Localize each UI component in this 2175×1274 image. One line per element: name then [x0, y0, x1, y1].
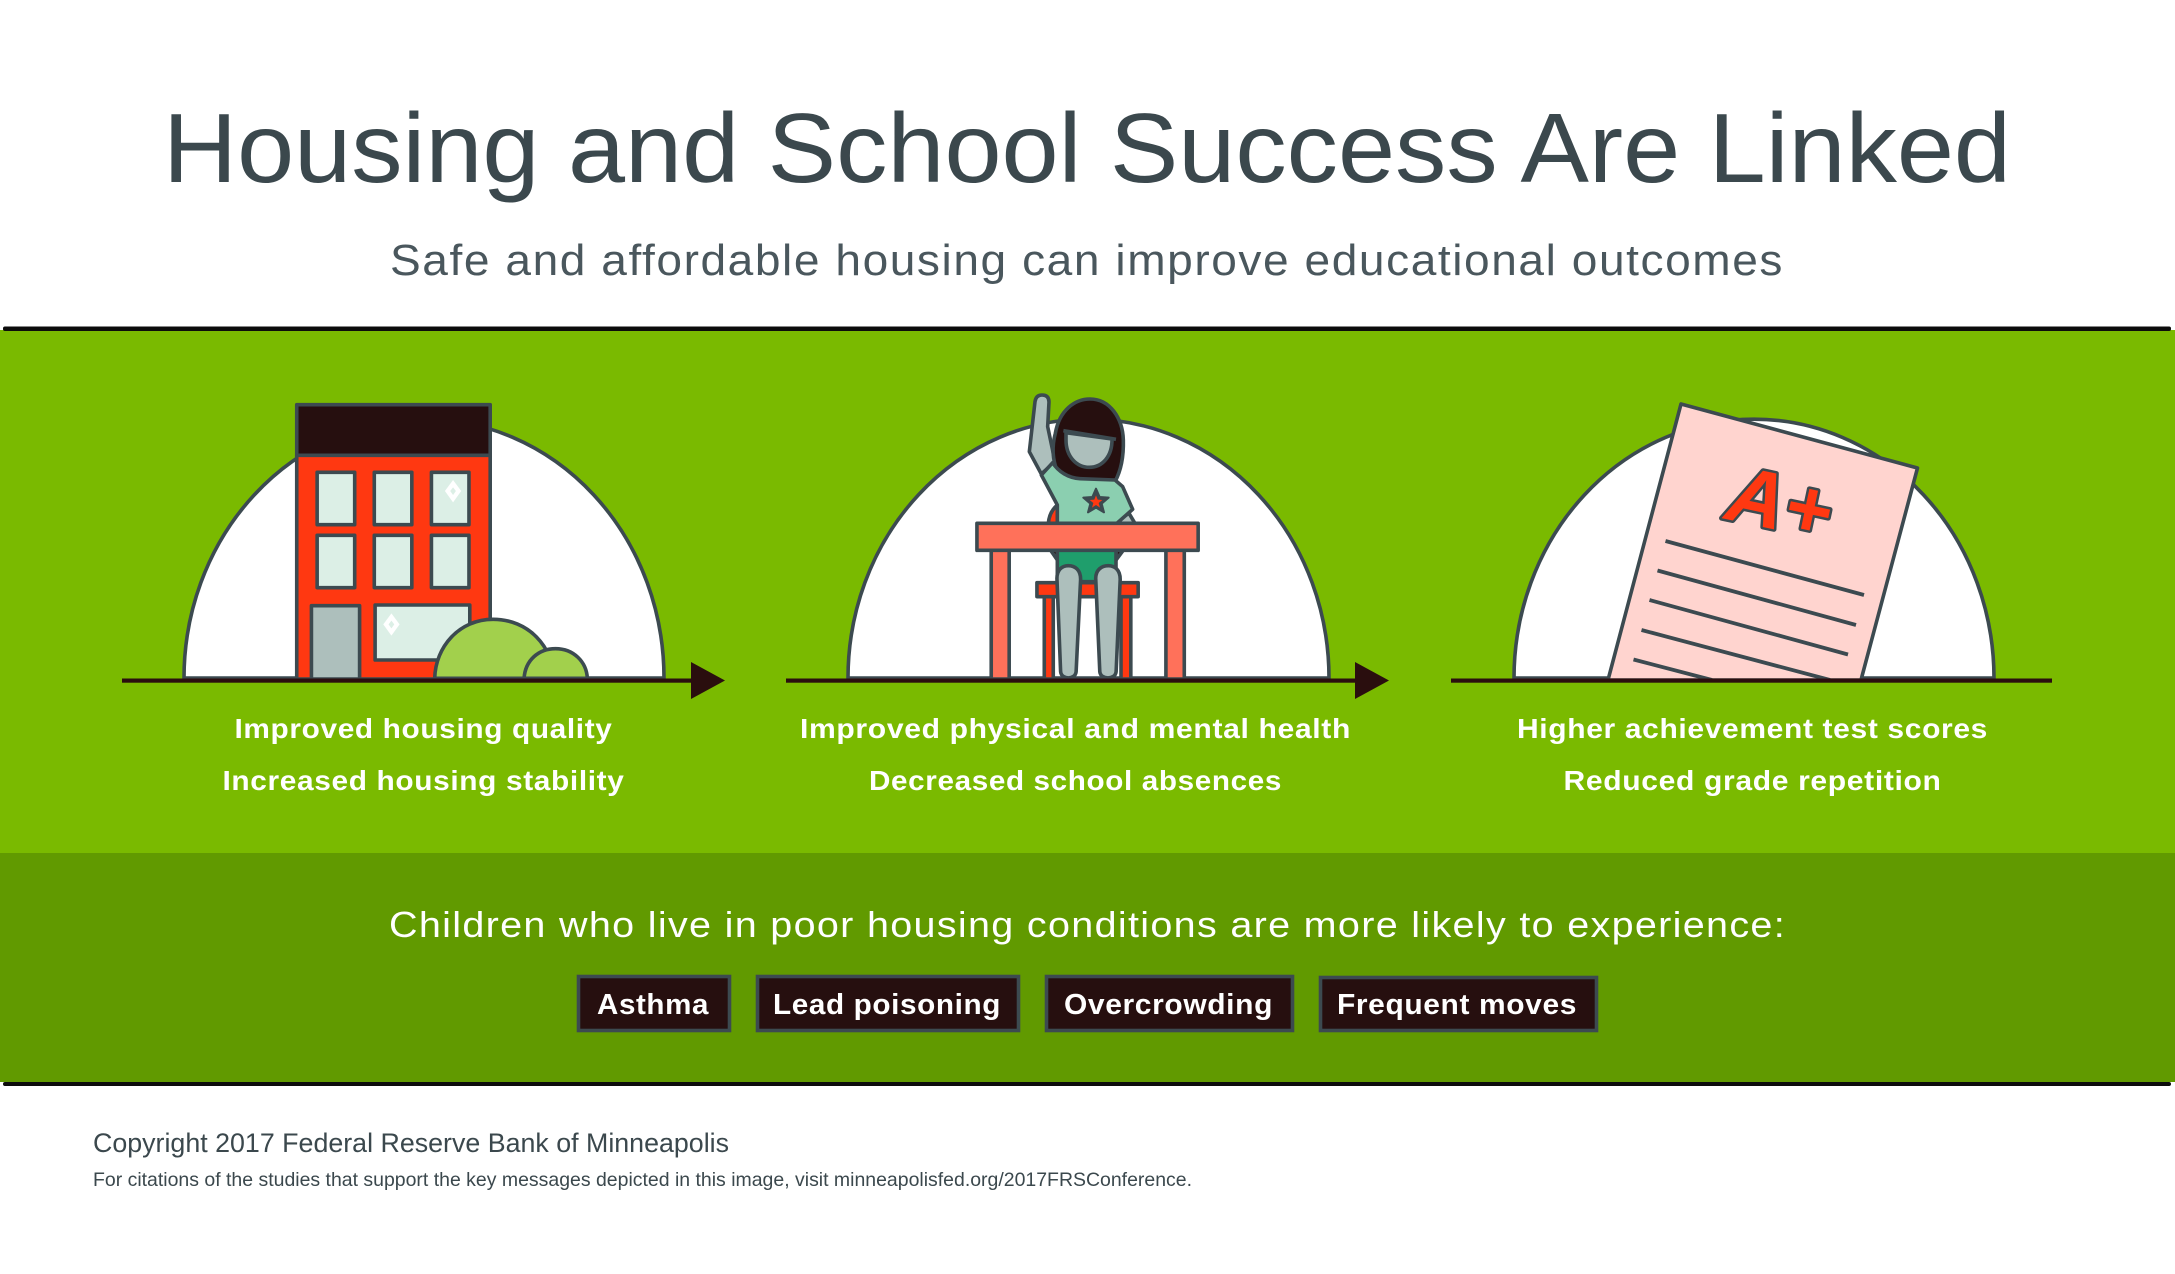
dome shape: [848, 419, 1329, 678]
tag: Frequent moves: [1320, 978, 1596, 1030]
panel: light green pathway band: [0, 326, 2175, 854]
tag: Overcrowding: [1046, 976, 1292, 1030]
tag: Lead poisoning: Lead poisoning: [773, 989, 1001, 1021]
subtitle: Safe and affordable housing can improve educational outcomes: [390, 236, 1784, 285]
step 2: student illustration: [848, 395, 1329, 679]
dome shape: [1514, 419, 1994, 678]
building and bushes: [297, 405, 587, 679]
tag: Overcrowding: Overcrowding: [1064, 989, 1273, 1021]
tag: Asthma: Asthma: [597, 989, 709, 1021]
step 2 label: health: Improved physical and mental health: [800, 713, 1351, 744]
panel: poor housing conditions band: [0, 853, 2175, 1086]
footer: copyright: Copyright 2017 Federal Reserve Bank of Minneapolis: [93, 1128, 729, 1158]
dome: [184, 419, 664, 678]
icon: stool: [1037, 566, 1138, 679]
step 1 label: housing stability: Increased housing stability: [222, 765, 624, 796]
icon: student legs: [1057, 566, 1120, 678]
step 1: housing illustration: [184, 405, 664, 679]
tag: Lead poisoning: [758, 976, 1018, 1030]
band heading: Children who live in poor housing conditions are more likely to experience:: [389, 904, 1786, 945]
tag: Frequent moves: Frequent moves: [1337, 989, 1577, 1021]
tag: Asthma: [578, 976, 730, 1030]
icon: building: [297, 405, 490, 679]
grade: A+: A+: [1718, 448, 1840, 557]
icon: student raising hand: [1029, 395, 1136, 582]
icon: desk: [977, 523, 1198, 679]
step 2 label: absences: Decreased school absences: [869, 765, 1282, 796]
footer: citation note: For citations of the studies that support the key messages depicted in this image, visit minneapolisfed.org/2017FRSConference.: [93, 1169, 1192, 1191]
step 2: timeline arrow: [786, 662, 1389, 699]
step 3 label: grade repetition: Reduced grade repetition: [1564, 765, 1942, 796]
step 3: test paper illustration: [1514, 404, 1994, 680]
step 3: baseline: [1451, 678, 2052, 683]
step 1 label: housing quality: Improved housing quality: [234, 713, 612, 744]
step 3 label: test scores: Higher achievement test scores: [1517, 713, 1988, 744]
icon: bushes: [435, 619, 587, 678]
icon: graded test paper: [1608, 404, 1918, 680]
title: Housing and School Success Are Linked: [163, 93, 2011, 203]
step 1: timeline arrow: [122, 662, 725, 699]
